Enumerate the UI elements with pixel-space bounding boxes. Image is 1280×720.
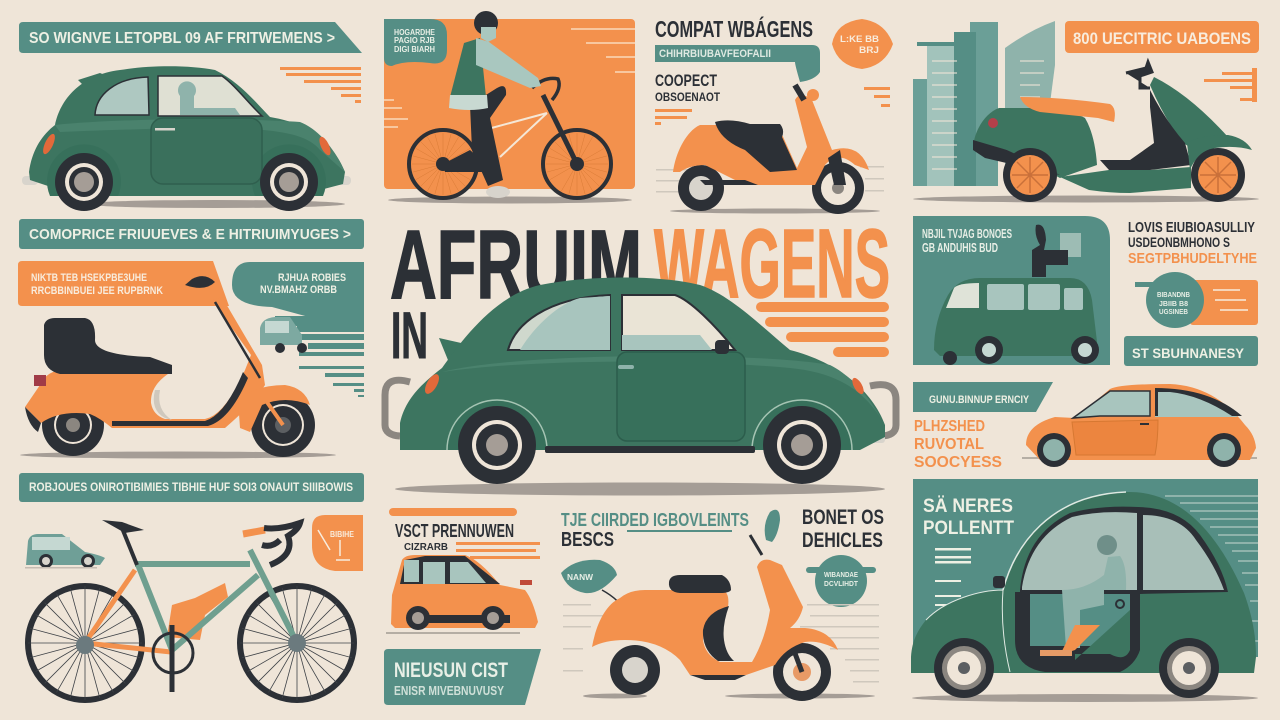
title: afruim wagens: AFRUIM [390, 210, 642, 319]
badge: orange blob [832, 19, 893, 69]
van: green minivan [934, 278, 1099, 365]
callout: teal note: PAGIO RJB [394, 36, 435, 45]
text block: orange car heading: VSCT PRENNUWEN [395, 521, 514, 541]
text block: right headings: USDEONBMHONO S [1128, 234, 1230, 250]
banner: slanted teal [913, 382, 1053, 412]
callout: teal note [384, 19, 447, 66]
panel: teal with mini car: NV.BMAHZ ORBB [260, 284, 337, 296]
callout: orange text box: NIKTB TEB HSEKPBE3UHE [31, 272, 147, 284]
title: afruim wagens [390, 209, 890, 372]
panel: teal van: NBJIL TVJAG BONOES [922, 226, 1012, 241]
text block: vehicles heading: BONET OS [802, 506, 884, 529]
panel: teal van: GB ANDUHIS BUD [922, 240, 998, 255]
badge: teal leaf label [561, 560, 625, 612]
text block: right headings: SEGTPBHUDELTYHE [1128, 250, 1257, 267]
bicycle: orange wheels [388, 78, 632, 204]
callout: teal note: DIGI BIARH [394, 45, 435, 54]
panel: teal with mini car [232, 262, 364, 397]
icon: figure and sign on van [1032, 225, 1081, 277]
callout: teal nieusun cist [384, 649, 541, 705]
scooter: orange bottom middle [563, 510, 879, 701]
callout: teal nieusun cist: ENISR MIVEBNUVUSY [394, 683, 504, 698]
text: panel heading: POLLENTT [923, 518, 1014, 539]
title: afruim wagens: WAGENS [654, 209, 890, 318]
bars: orange near scooter [655, 87, 890, 125]
text block: orange three lines: SOOCYESS [914, 454, 1002, 471]
badge: orange blob: L:KE BB [840, 34, 880, 44]
text block: middle heading: TJE CIIRDED IGBOVLEINTS [561, 510, 749, 530]
panel: teal van [913, 216, 1110, 365]
text block: middle heading [561, 510, 749, 551]
heading: compact wagens: OBSOENAOT [655, 90, 721, 104]
badge: teal round label: DCVLIHDT [824, 581, 859, 588]
panel: teal with mini car: RJHUA ROBIES [278, 272, 346, 284]
badge: teal leaf label: NANW [567, 573, 593, 582]
car: orange hatchback [1022, 384, 1257, 467]
bars: orange top right [1204, 68, 1257, 102]
callout: orange card with teal circle: JBIIB B8 [1159, 301, 1188, 308]
car: main green hero [385, 278, 896, 496]
heading: compact wagens: CHIHRBIUBAVFEOFALII [659, 48, 771, 60]
callout: orange text box [18, 261, 229, 306]
badge: teal round label: WIBANDAE [824, 572, 858, 579]
banner: electric wagens [1065, 21, 1259, 53]
banner: small teal summary: ST SBUHNANESY [1132, 345, 1245, 361]
panel: orange cyclist [384, 11, 635, 204]
callout: orange card with teal circle: UGSINEB [1159, 309, 1188, 316]
text block: orange three lines: RUVOTAL [914, 436, 984, 453]
callout: teal note: HOGARDHE [394, 28, 436, 37]
person: cyclist [449, 11, 541, 198]
bicycle: large road bike [28, 520, 354, 700]
banner: second left heading: COMOPRICE FRIUUEVES & E HITRIUIMYUGES > [29, 226, 351, 243]
text block: right headings [1128, 219, 1257, 267]
banner: slanted teal: GUNU.BINNUP ERNCIY [929, 394, 1030, 406]
callout: orange card with teal circle [1135, 272, 1258, 328]
text block: orange car heading: CIZRARB [404, 542, 448, 553]
bars: orange under title [756, 302, 889, 357]
car: green compact top left [22, 66, 351, 211]
title: afruim wagens: IN [391, 298, 428, 372]
banner: third left heading [19, 473, 364, 502]
scooter: orange top middle [656, 85, 884, 214]
callout: orange text box: RRCBBINBUEI JEE RUPBRNK [31, 285, 163, 297]
text block: orange car heading [389, 508, 540, 559]
badge: teal round label [806, 555, 876, 607]
text block: vehicles heading [802, 506, 884, 552]
callout: orange card with teal circle: BIBANDNB [1157, 292, 1190, 299]
icon: orange tag [312, 515, 363, 571]
icon: orange tag: BIBIHE [330, 530, 355, 539]
badge: orange blob: BRJ [859, 45, 879, 55]
car: small orange van [386, 555, 538, 634]
banner: second left heading [19, 219, 364, 249]
text: panel heading: SÄ NERES [923, 496, 1013, 517]
scooter: green electric [913, 62, 1259, 202]
text block: orange three lines [914, 418, 1002, 471]
banner: third left heading: ROBJOUES ONIROTIBIMIES TIBHIE HUF SOI3 ONAUIT SIIIBOWIS [29, 480, 353, 494]
heading: compact wagens: COOPECT [655, 71, 717, 90]
icon: mini car [25, 534, 105, 568]
panel: bottom right teal with cabin car [911, 479, 1258, 702]
heading: compact wagens: COMPAT WBÁGENS [655, 15, 813, 42]
illustration: city buildings [913, 21, 1055, 186]
scooter: large orange left [20, 276, 336, 458]
banner: top left heading [19, 22, 362, 53]
text: panel heading [923, 496, 1014, 539]
bars: orange beside green car [280, 67, 361, 103]
text block: orange three lines: PLHZSHED [914, 418, 985, 435]
banner: top left heading: SO WIGNVE LETOPBL 09 AF FRITWEMENS > [29, 30, 335, 47]
text block: vehicles heading: DEHICLES [802, 529, 883, 552]
car: green cabin with driver [911, 492, 1258, 702]
banner: small teal summary [1124, 336, 1258, 366]
text block: middle heading: BESCS [561, 529, 614, 551]
heading: compact wagens [655, 15, 820, 104]
banner: electric wagens: 800 UECITRIC UABOENS [1073, 29, 1251, 48]
callout: teal nieusun cist: NIEUSUN CIST [394, 659, 508, 682]
